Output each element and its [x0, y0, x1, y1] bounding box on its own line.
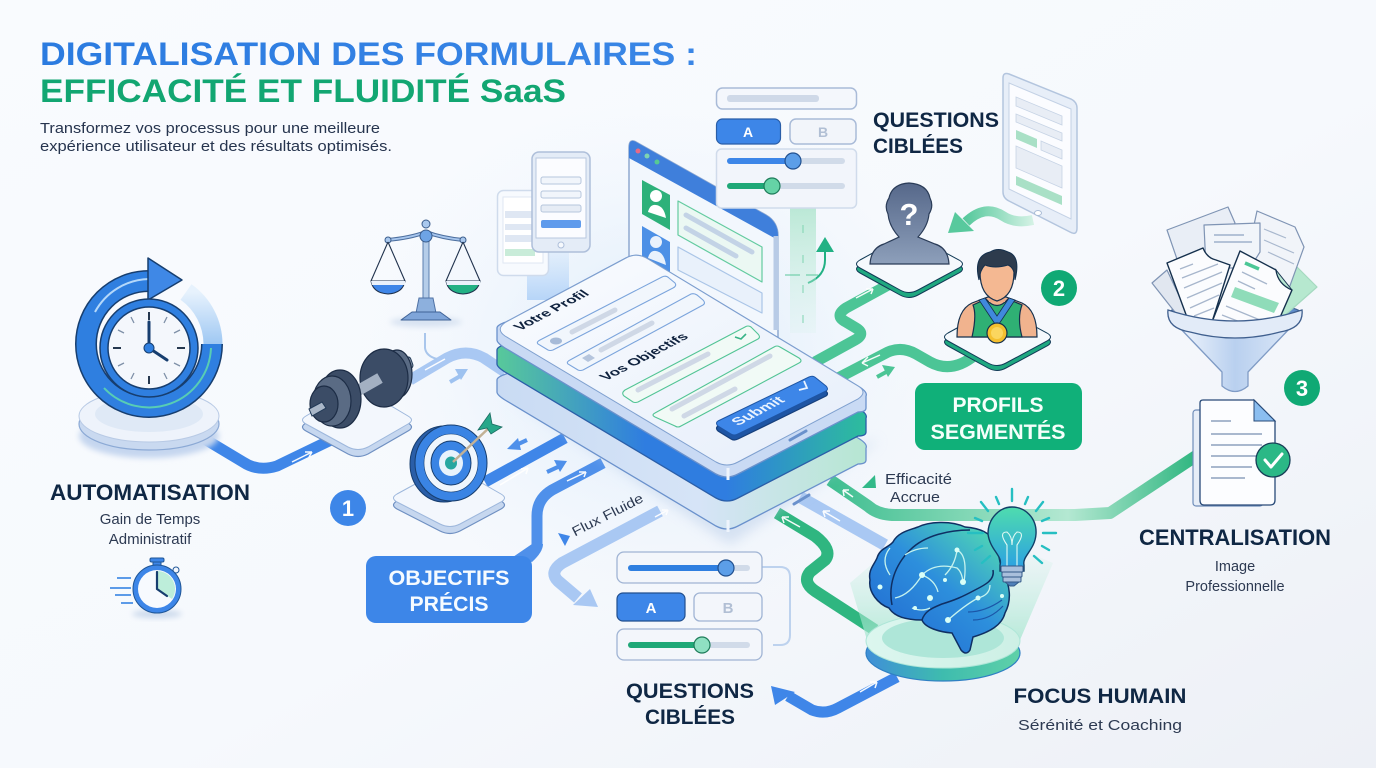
icon: brain with light bulb [850, 489, 1056, 681]
text: focus humain [1014, 684, 1186, 734]
platform [394, 468, 504, 534]
icon: dumbbell [302, 349, 414, 456]
icon: tablet form [1003, 74, 1077, 233]
label: profils segmentés: PROFILS [952, 394, 1044, 417]
badge 2 [1041, 270, 1077, 306]
beam: top widget to form [785, 208, 818, 333]
platform [856, 236, 962, 298]
green arrow from beam [808, 250, 825, 283]
browser card: blue [678, 247, 762, 313]
browser avatar: blue [642, 226, 670, 275]
heading: questions ciblées bottom [626, 679, 754, 729]
subtitle [40, 121, 392, 155]
title [40, 36, 697, 109]
button: submit [716, 376, 828, 440]
back papers [1152, 207, 1317, 319]
arrow head [148, 258, 182, 300]
icon: athlete profile [944, 250, 1050, 370]
path arrows [292, 289, 880, 692]
icon: target [394, 413, 504, 534]
heading: questions ciblées bottom: CIBLÉES [645, 704, 735, 729]
badge 1 [330, 490, 366, 526]
title: EFFICACITÉ ET FLUIDITÉ SaaS [40, 73, 566, 109]
badge 1: 1 [342, 496, 354, 521]
field: email [567, 294, 704, 370]
clock face [100, 299, 198, 397]
slider blue [617, 552, 762, 583]
text: centralisation: CENTRALISATION [1139, 525, 1331, 550]
text: centralisation: Professionnelle [1185, 579, 1285, 595]
icon: unknown profile silhouette: ? [900, 197, 918, 232]
button B: B [818, 124, 828, 140]
heading: questions ciblées top: QUESTIONS [873, 108, 999, 132]
icon: scales [371, 220, 480, 327]
label: efficacité accrue [885, 472, 952, 506]
label: votre profil: Votre Profil [511, 288, 593, 333]
badge 3: 3 [1296, 376, 1308, 401]
label: efficacité accrue: Efficacité [885, 472, 952, 488]
title: DIGITALISATION DES FORMULAIRES : [40, 36, 697, 72]
detached arrows [450, 237, 895, 705]
layer 1 [497, 255, 866, 477]
platform [944, 308, 1050, 370]
field: objective green [623, 326, 760, 402]
flow paths: green [777, 211, 1196, 630]
button A: A [743, 124, 753, 140]
icon: papers in funnel [1152, 207, 1317, 323]
layer 2 [497, 277, 866, 501]
layer 3 [497, 307, 866, 529]
icon: centralised document [1193, 400, 1290, 506]
field: name [537, 276, 676, 350]
front paper left [1167, 248, 1230, 322]
label: profils segmentés: SEGMENTÉS [930, 421, 1066, 444]
platform [302, 389, 412, 456]
button A [617, 593, 685, 621]
panel: browser window [629, 141, 778, 340]
button B: B [723, 600, 734, 617]
label: objectifs précis [366, 544, 543, 623]
text: automatisation: Gain de Temps [100, 511, 200, 528]
subtitle: expérience utilisateur et des résultats optimisés. [40, 139, 392, 155]
bracket [762, 567, 790, 645]
text: centralisation: Image [1215, 559, 1255, 575]
icon: front phone [532, 152, 590, 252]
label: objectifs précis: PRÉCIS [410, 593, 488, 616]
panel: central form stack [497, 255, 880, 545]
icon: back phone [498, 190, 548, 276]
port details [790, 431, 806, 440]
badge 3 [1284, 370, 1320, 406]
button B [694, 593, 762, 621]
top face [500, 255, 863, 465]
label: objectifs précis: OBJECTIFS [388, 567, 510, 590]
icon: funnel rim [1168, 310, 1302, 338]
subtitle: Transformez vos processus pour une meilleure [40, 121, 380, 137]
button A: A [646, 600, 657, 617]
flow paths: blue [203, 333, 897, 712]
icon: unknown profile silhouette [856, 183, 962, 298]
field: objective detail [653, 346, 801, 427]
label: vos objectifs: Vos Objectifs [597, 331, 693, 383]
rays [968, 489, 1056, 563]
beam: phones to form [527, 250, 569, 300]
light beam [850, 540, 1053, 640]
heading: questions ciblées top [873, 108, 999, 158]
label: flux fluide: Flux Fluide [569, 490, 646, 539]
browser card: green [678, 201, 762, 282]
label: profils segmentés [915, 383, 1082, 450]
arrow: green into silhouette [948, 212, 974, 233]
icon: stopwatch [110, 558, 182, 618]
panel: top question widget [716, 88, 856, 208]
platform [866, 614, 1020, 681]
text: centralisation [1139, 525, 1331, 595]
panel: bottom question widget [617, 552, 790, 660]
bulb [988, 507, 1036, 586]
clock base [79, 390, 219, 458]
text: focus humain: Sérénité et Coaching [1018, 718, 1182, 734]
button: submit: Submit [728, 394, 789, 428]
text: automatisation: AUTOMATISATION [50, 480, 250, 505]
browser avatar: green [642, 180, 670, 230]
heading: questions ciblées bottom: QUESTIONS [626, 679, 754, 703]
text: focus humain: FOCUS HUMAIN [1014, 684, 1186, 708]
label: efficacité accrue: Accrue [890, 490, 940, 506]
icon: clock with cycle arrow [79, 258, 219, 458]
heading: questions ciblées top: CIBLÉES [873, 133, 963, 158]
icon: funnel cone [1178, 326, 1292, 392]
check badge [1256, 443, 1290, 477]
badge 2: 2 [1053, 276, 1065, 301]
front paper right [1212, 251, 1292, 322]
text: automatisation [50, 480, 250, 548]
sliders panel [716, 149, 856, 208]
text: automatisation: Administratif [109, 531, 192, 548]
slider green [617, 629, 762, 660]
brain [870, 522, 1009, 653]
